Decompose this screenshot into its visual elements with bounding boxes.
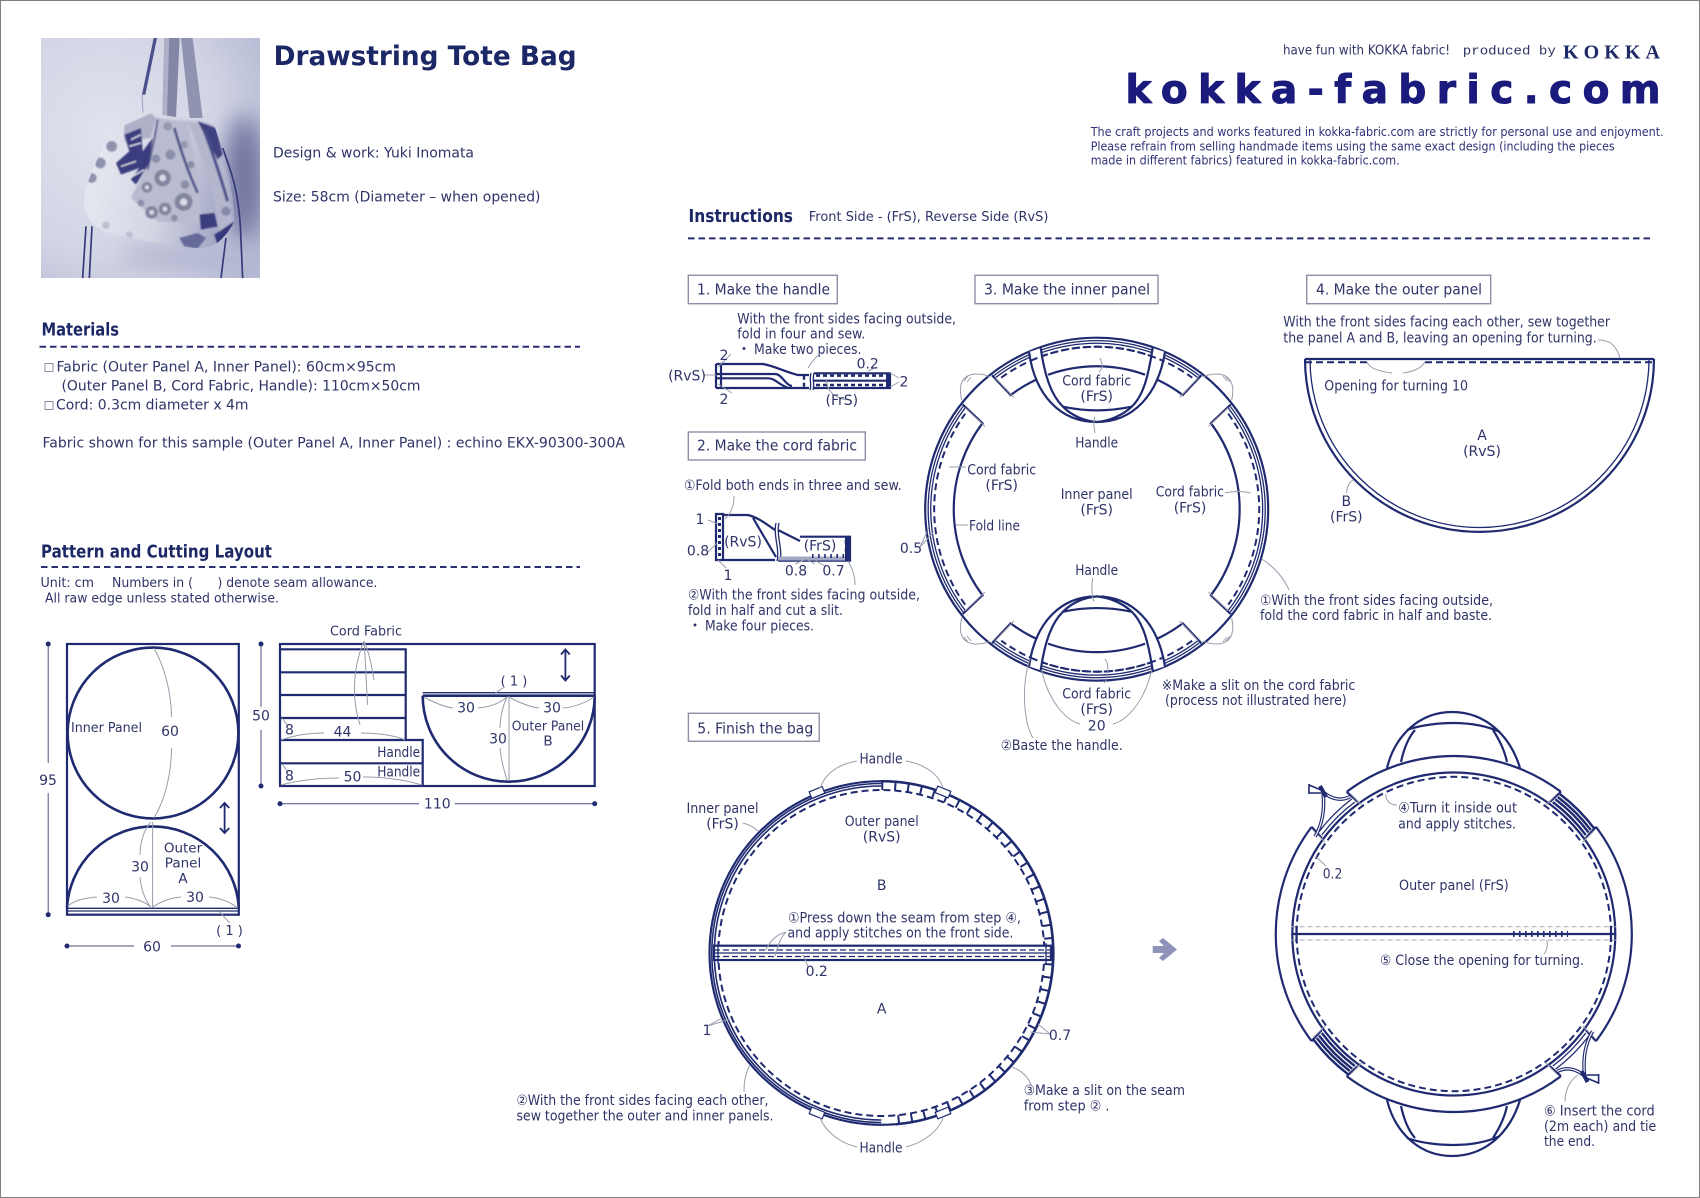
- finished bag labels: ⑤ Close the opening for turning.: [1380, 953, 1584, 969]
- unit note: ) denote seam allowance.: [218, 576, 378, 591]
- step 1 heading: [688, 275, 837, 304]
- cutting layout: 60 x 95 fabric: 95: [39, 773, 57, 789]
- unit note: [40, 576, 378, 606]
- step 5 labels: Outer panel: [845, 814, 919, 830]
- outer panel half circle diagram: [1305, 340, 1654, 532]
- step 5 instruction 2: ②With the front sides facing each other,: [516, 1093, 768, 1109]
- step 5 instruction 3: from step ② .: [1024, 1099, 1110, 1115]
- finished bag diagram: [1276, 712, 1656, 1156]
- cutting layout: 60 x 95 fabric: 30: [186, 890, 204, 906]
- produced by: produced by: [1463, 44, 1556, 59]
- step 2 heading: [688, 432, 865, 460]
- step 3 heading: [975, 275, 1158, 304]
- cord fabric strip diagram: (FrS): [804, 539, 836, 555]
- title: Drawstring Tote Bag: [274, 41, 577, 72]
- cord knot: bottom right: [1558, 1031, 1599, 1084]
- cord fabric strip diagram: 0.7: [822, 564, 845, 580]
- step 2 second instruction: [688, 587, 920, 636]
- cutting layout: 60 x 95 fabric: A: [178, 871, 188, 887]
- cutting layout: 60 x 95 fabric: 30: [131, 860, 149, 876]
- step 5 labels: Handle: [860, 1140, 902, 1156]
- cutting layout: 60 x 95 fabric: 30: [102, 891, 120, 907]
- step 5 labels: 0.7: [1049, 1028, 1071, 1044]
- cutting layout: 110 x 50 fabric: Handle: [377, 765, 420, 781]
- cutting layout: 110 x 50 fabric: 8: [285, 722, 294, 738]
- step 5 labels: Inner panel: [686, 801, 758, 817]
- cutting layout: 110 x 50 fabric: Cord Fabric: [330, 624, 402, 640]
- heading: materials: Materials: [42, 319, 119, 340]
- bag circle with topstitching: [1292, 772, 1615, 1096]
- cutting layout: 60 x 95 fabric: Panel: [165, 856, 201, 872]
- step 5 heading: 5. Finish the bag: [697, 719, 813, 737]
- size: Size: 58cm (Diameter – when opened): [273, 190, 540, 206]
- usage notice: [1090, 124, 1664, 168]
- cord knot: top left: [1309, 784, 1350, 837]
- finished bag labels: ⑥ Insert the cord: [1544, 1104, 1655, 1120]
- website logotype: kokka-fabric.com: [1126, 68, 1660, 113]
- step 5 instruction 1: [788, 910, 1021, 942]
- finished bag labels: and apply stitches.: [1398, 816, 1516, 832]
- step 3 labels: Inner panel: [1061, 487, 1133, 503]
- materials list: Fabric (Outer Panel A, Inner Panel): 60cm×95cm: [56, 360, 396, 376]
- cutting layout: 110 x 50 fabric: B: [543, 734, 553, 750]
- heading: instructions: Instructions: [688, 206, 793, 227]
- materials list: (Outer Panel B, Cord Fabric, Handle): 110cm×50cm: [62, 379, 420, 395]
- cutting layout: 110 x 50 fabric: 8: [285, 769, 294, 785]
- sewn circle with slit seam: [710, 781, 1053, 1125]
- finished bag labels: [1323, 801, 1656, 1150]
- step 1 heading: 1. Make the handle: [697, 280, 830, 298]
- handle: bottom: [1387, 1100, 1520, 1156]
- step 3 note: make a slit: ※Make a slit on the cord fabric: [1162, 678, 1355, 694]
- step 3 labels: [900, 374, 1224, 735]
- step 4: make the outer panel: [1283, 275, 1654, 532]
- step 3 labels: 0.5: [900, 541, 922, 557]
- step 3 instruction: fold the cord fabric: fold the cord fabric in half and baste.: [1260, 608, 1492, 624]
- step 5 leaders: [708, 761, 1050, 1147]
- step 2 heading: 2. Make the cord fabric: [697, 437, 857, 455]
- step 1 instructions: fold in four and sew.: [737, 326, 865, 342]
- step 1 instructions: Make two pieces.: [754, 342, 862, 358]
- step 3 heading: 3. Make the inner panel: [984, 280, 1150, 298]
- step 5 labels: (RvS): [863, 830, 901, 846]
- cutting layout: 110 x 50 fabric: 30: [543, 701, 561, 717]
- cord fabric strip diagram: [687, 496, 855, 585]
- cord fabric strip diagram: 1: [696, 512, 704, 528]
- unit note: All raw edge unless stated otherwise.: [45, 591, 279, 606]
- step 3 labels: (FrS): [985, 478, 1018, 494]
- step 1: make the handle: [668, 275, 956, 409]
- handle strip diagram: (RvS): [668, 369, 706, 385]
- arrow to finished bag: [1153, 938, 1177, 961]
- finished bag leaders: [1316, 794, 1578, 1102]
- step 5 labels: A: [877, 1001, 887, 1017]
- step 5 instruction 2: [516, 1093, 774, 1124]
- handle strip diagram: 2: [720, 348, 728, 364]
- photo: finished drawstring bag: [41, 38, 264, 278]
- step 5: finish the bag: [516, 712, 1656, 1156]
- cord fabric band: top: [992, 341, 1201, 397]
- designer credit: Design & work: Yuki Inomata: [273, 146, 474, 162]
- cutting layout: 110 x 50 fabric: 110: [424, 797, 451, 813]
- handle strip diagram: 2: [720, 392, 728, 408]
- cutting layout: 60 x 95 fabric: ( 1 ): [216, 924, 243, 939]
- step 4 instruction: With the front sides facing each other, sew together: [1283, 315, 1610, 331]
- step 3 instruction: fold the cord fabric: ①With the front sides facing outside,: [1260, 593, 1493, 609]
- step 3 labels: Cord fabric: [1062, 686, 1131, 702]
- step 2 second instruction: ②With the front sides facing outside,: [688, 587, 920, 603]
- step 5 labels: (FrS): [706, 816, 739, 832]
- finished bag labels: Outer panel (FrS): [1399, 878, 1509, 894]
- cutting layout: 110 x 50 fabric: 30: [489, 731, 507, 747]
- step 3 labels: Cord fabric: [1156, 485, 1224, 501]
- handle: top: [1387, 712, 1520, 768]
- step 2 second instruction: ・: [688, 616, 702, 636]
- step 3 leaders and equal-gap marks: [920, 358, 1289, 738]
- step 3 instruction: fold the cord fabric: [1260, 593, 1493, 624]
- handle strip diagram: 0.2: [857, 356, 879, 372]
- cord channel bands: [1276, 756, 1632, 1112]
- cutting layout: 60 x 95 fabric: 60: [143, 940, 161, 956]
- step 3 labels: (FrS): [1080, 503, 1113, 519]
- kokka logotype: KOKKA: [1563, 41, 1661, 63]
- step 4 heading: 4. Make the outer panel: [1316, 280, 1482, 298]
- finished bag labels: ④Turn it inside out: [1398, 801, 1517, 817]
- outer panel half circle diagram: A: [1477, 428, 1487, 444]
- step 4 instruction: the panel A and B, leaving an opening for turning.: [1283, 331, 1597, 347]
- step 2 second instruction: Make four pieces.: [705, 619, 814, 635]
- cutting layout: 110 x 50 fabric: 50: [252, 709, 270, 725]
- step 1 instructions: With the front sides facing outside,: [737, 311, 956, 327]
- kokka tagline: have fun with KOKKA fabric!: [1283, 44, 1450, 59]
- cord fabric strip diagram: 1: [724, 568, 732, 584]
- step 5 labels: [686, 751, 1071, 1156]
- cutting layout: 110 x 50 fabric: 30: [457, 701, 475, 717]
- cord fabric band: bottom: [992, 621, 1201, 678]
- exposed cords in the gaps: [1314, 794, 1594, 1074]
- step 4 heading: [1307, 275, 1491, 304]
- finished bag labels: (2m each) and tie: [1544, 1119, 1656, 1135]
- outer panel half circle diagram: (FrS): [1330, 510, 1363, 526]
- cutting layout: 110 x 50 fabric: ( 1 ): [501, 675, 527, 690]
- step 5 labels: B: [877, 878, 887, 894]
- usage notice: made in different fabrics) featured in kokka-fabric.com.: [1091, 153, 1400, 168]
- step 1 instructions: ・: [737, 339, 751, 359]
- step 3 note: make a slit: (process not illustrated here): [1165, 693, 1347, 709]
- outer panel half circle diagram: Opening for turning 10: [1324, 379, 1468, 395]
- step 2: make the cord fabric: [684, 432, 920, 636]
- heading: pattern and cutting layout: Pattern and Cutting Layout: [41, 542, 272, 563]
- step 3: make the inner panel: [900, 275, 1493, 754]
- cutting layout: 110 x 50 fabric: Handle: [377, 745, 420, 761]
- step 3 instruction: baste the handle: ②Baste the handle.: [1001, 738, 1123, 754]
- cutting layout: 60 x 95 fabric: Inner Panel: [71, 720, 142, 736]
- step 4 instruction: [1283, 315, 1610, 347]
- unit note: Unit: cm: [40, 576, 94, 591]
- step 3 labels: 20: [1088, 719, 1106, 735]
- step 2 second instruction: fold in half and cut a slit.: [688, 603, 843, 619]
- cord fabric strip diagram: 0.8: [687, 544, 709, 560]
- step 5 labels: Handle: [860, 751, 902, 767]
- handle basted at bottom: [1029, 596, 1165, 672]
- step 3 labels: (FrS): [1080, 389, 1113, 405]
- step 5 instruction 1: and apply stitches on the front side.: [788, 926, 1013, 942]
- materials list: Fabric shown for this sample (Outer Panel A, Inner Panel) : echino EKX-90300-300A: [42, 435, 625, 451]
- unit note: Numbers in (: [112, 576, 193, 591]
- cutting layout: 110 x 50 fabric: 44: [334, 725, 351, 741]
- cutting layout: 110 x 50 fabric: [252, 624, 597, 813]
- finished bag labels: the end.: [1544, 1134, 1595, 1150]
- step 5 instruction 1: ①Press down the seam from step ④,: [788, 910, 1021, 926]
- cutting layout: 110 x 50 fabric: Outer Panel: [512, 718, 584, 734]
- step 3 labels: (FrS): [1080, 702, 1113, 718]
- cutting layout: 60 x 95 fabric: 60: [161, 724, 179, 740]
- centre seam with closed opening: [1292, 926, 1616, 942]
- handle basted at top: [1029, 347, 1165, 422]
- step 3 labels: (FrS): [1174, 501, 1206, 517]
- handle strip diagram: (FrS): [825, 393, 858, 409]
- cord fabric band: right: [1208, 404, 1265, 614]
- cord fabric strip diagram: 0.8: [785, 564, 807, 580]
- step 5 labels: 0.2: [806, 964, 828, 980]
- cutting layout: 60 x 95 fabric: [39, 642, 243, 956]
- step 2 first instruction: ①Fold both ends in three and sew.: [684, 478, 902, 494]
- cutting layout: 110 x 50 fabric: 50: [344, 770, 361, 786]
- step 3 labels: Cord fabric: [1062, 374, 1131, 390]
- legend: fabric side abbreviations: Front Side - (FrS), Reverse Side (RvS): [809, 209, 1048, 225]
- step 5 instruction 3: ③Make a slit on the seam: [1024, 1083, 1185, 1099]
- materials list: Cord: 0.3cm diameter x 4m: [56, 398, 248, 414]
- step 3 labels: Cord fabric: [967, 462, 1036, 478]
- handle strip diagram: [668, 348, 908, 409]
- step 3 labels: Handle: [1075, 563, 1118, 579]
- cutting layout: 60 x 95 fabric: Outer: [164, 840, 203, 856]
- step 3 labels: Handle: [1075, 435, 1118, 451]
- cord fabric band: left: [928, 404, 985, 614]
- step 1 instructions: [737, 311, 956, 359]
- usage notice: Please refrain from selling handmade items using the same exact design (including the pieces: [1091, 139, 1615, 154]
- step 5 labels: 1: [703, 1023, 711, 1039]
- step 5 heading: [688, 713, 819, 741]
- step 5 instruction 2: sew together the outer and inner panels.: [516, 1108, 774, 1124]
- outer panel half circle diagram: (RvS): [1463, 444, 1501, 460]
- cord fabric strip diagram: (RvS): [724, 535, 762, 551]
- step 5 instruction 3: [1024, 1083, 1185, 1115]
- finished bag labels: 0.2: [1323, 866, 1342, 882]
- outer panel half circle diagram: B: [1341, 494, 1351, 510]
- step 3 labels: Fold line: [969, 519, 1020, 535]
- inner panel circle: [925, 338, 1268, 681]
- materials list: [42, 360, 625, 451]
- handle strip diagram: 2: [900, 375, 908, 391]
- step 3 note: make a slit: [1162, 678, 1355, 709]
